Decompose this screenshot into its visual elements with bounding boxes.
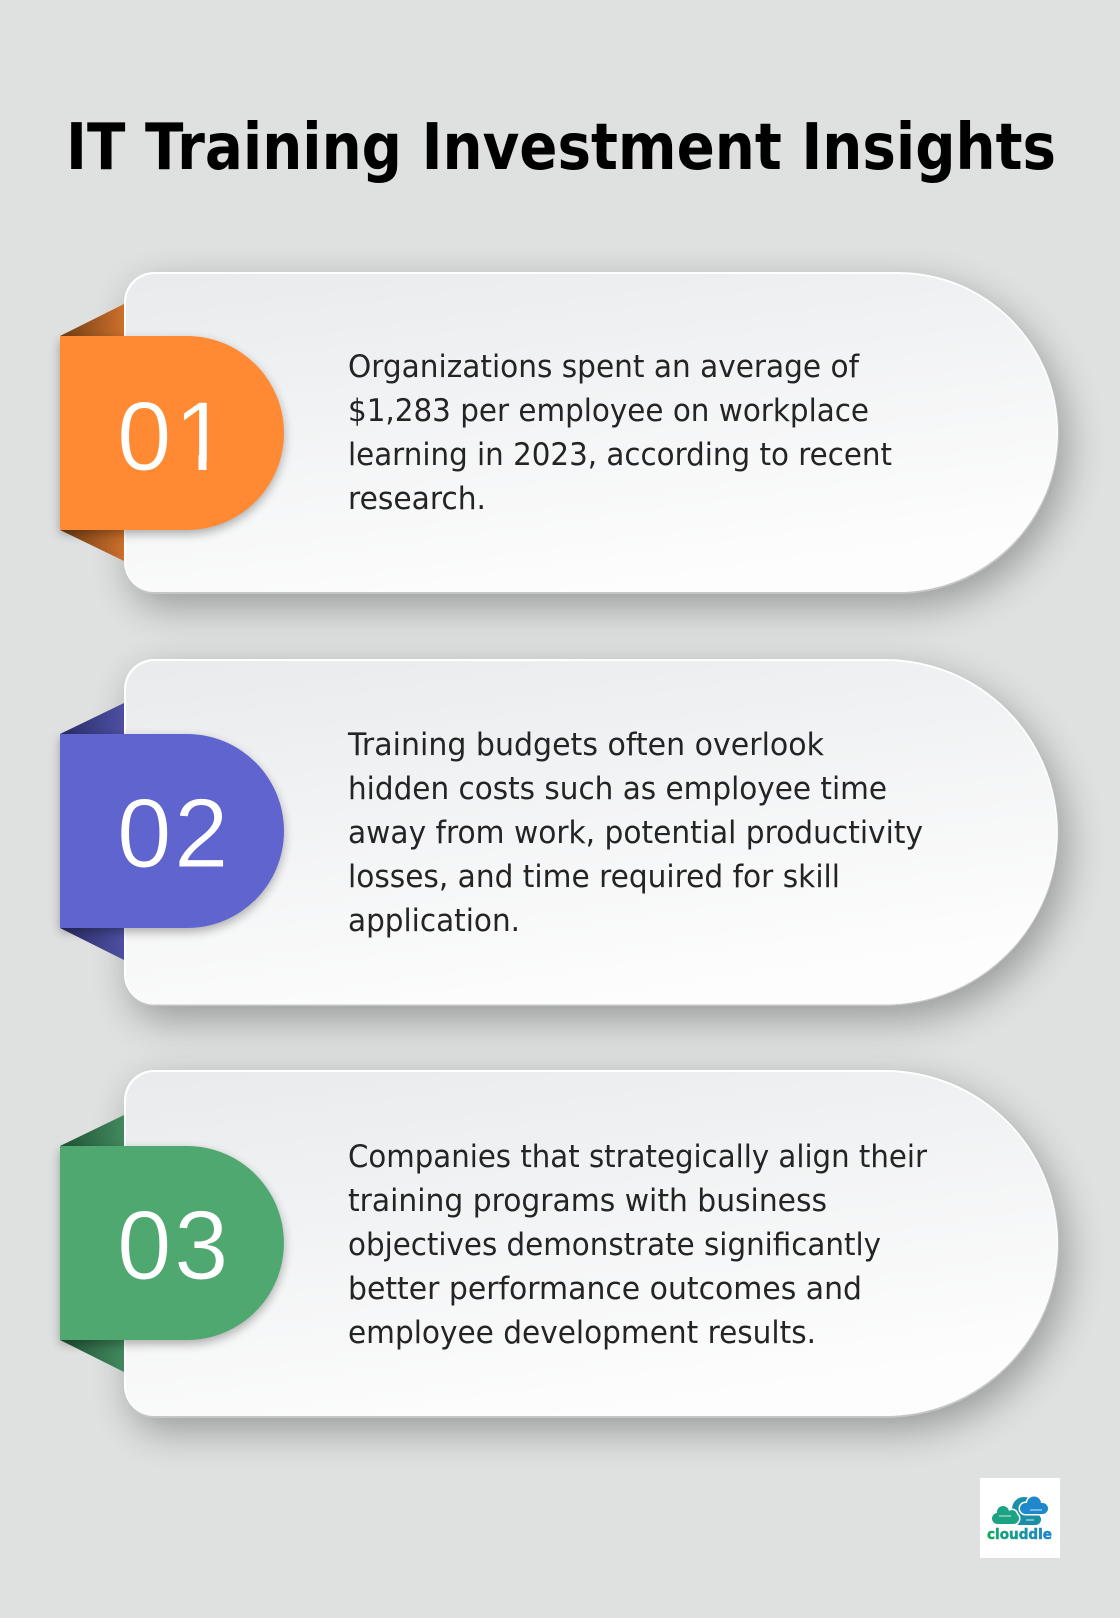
fold: green top — [60, 1115, 124, 1146]
logo: clouddle — [980, 1478, 1060, 1558]
logo wordmark: clouddle — [987, 1527, 1052, 1543]
text: insight 03: training programs with business — [348, 1183, 827, 1219]
fold: orange top — [60, 304, 124, 336]
text: insight 02: away from work, potential productivity — [348, 815, 923, 851]
number 03: 03 — [117, 1190, 229, 1300]
text: insight 01: learning in 2023, according to recent — [348, 437, 892, 473]
text: insight 01: research. — [348, 481, 486, 517]
text: insight 02: application. — [348, 903, 520, 939]
text: insight 02: losses, and time required for skill — [348, 859, 840, 895]
number badge 02 — [60, 734, 284, 928]
text: insight 01: $1,283 per employee on workplace — [348, 393, 869, 429]
number 02: 02 — [117, 778, 229, 888]
text: insight 03: Companies that strategically align their — [348, 1139, 927, 1175]
panel: insight 02 — [60, 659, 1066, 1019]
fold: blue top — [60, 703, 124, 734]
text: insight 01: Organizations spent an average of — [348, 349, 860, 385]
text: insight 02: hidden costs such as employee time — [348, 771, 887, 807]
fold: orange bottom — [60, 530, 124, 561]
text: insight 01 — [348, 349, 892, 517]
text: insight 02 — [347, 727, 923, 939]
fold: blue bottom — [60, 928, 124, 960]
icon: clouds — [990, 1495, 1050, 1526]
text: insight 03: objectives demonstrate significantly — [348, 1227, 881, 1263]
panel: insight 01 — [60, 272, 1066, 606]
number badge 03 — [60, 1146, 284, 1340]
text: insight 03 — [348, 1139, 927, 1351]
fold: green bottom — [60, 1340, 124, 1372]
text: insight 02: Training budgets often overlook — [347, 727, 824, 763]
number badge 01 — [60, 336, 284, 530]
number 01: 01 — [117, 381, 229, 491]
text: insight 03: better performance outcomes and — [348, 1271, 862, 1307]
text: insight 03: employee development results. — [348, 1315, 816, 1351]
panel: insight 03 — [60, 1070, 1066, 1430]
